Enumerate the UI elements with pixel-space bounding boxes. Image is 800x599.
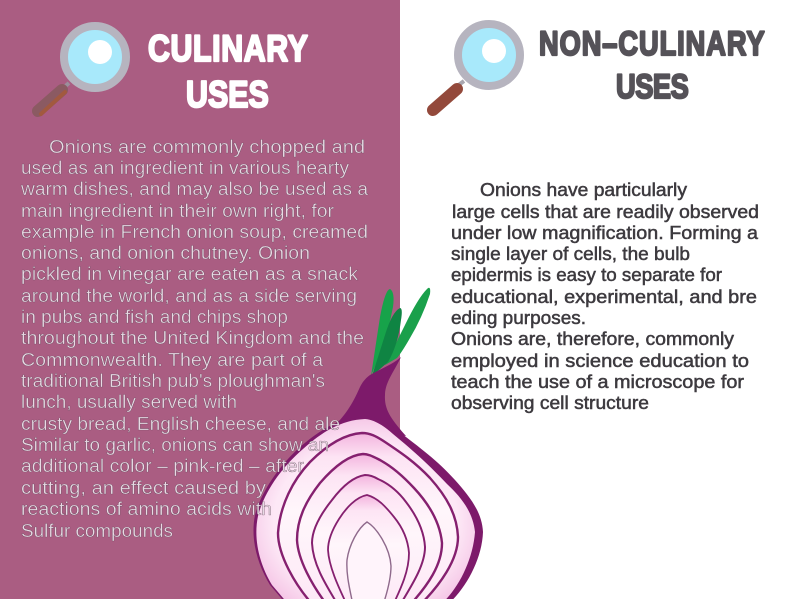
text block: culinary description: main ingredient in their own right, for xyxy=(21,201,334,221)
text block: culinary description: Onions are commonly chopped and xyxy=(49,137,365,157)
text block: culinary description: throughout the United Kingdom and the xyxy=(21,328,364,348)
panel: culinary background xyxy=(0,0,400,599)
text block: culinary description xyxy=(20,137,369,541)
text block: culinary description: reactions of amino acids with xyxy=(21,499,272,519)
text block: culinary description: Commonwealth. They are part of a xyxy=(21,350,324,370)
panel: non-culinary background xyxy=(400,0,800,599)
text block: non-culinary description: large cells that are readily observed xyxy=(452,202,759,222)
text block: culinary description: additional color – pink-red – after xyxy=(21,456,304,476)
heading: non-culinary uses xyxy=(539,24,765,106)
text block: culinary description: crusty bread, English cheese, and ale xyxy=(21,414,340,434)
text block: non-culinary description xyxy=(451,180,759,413)
text block: non-culinary description: employed in science education to xyxy=(451,351,749,371)
text block: non-culinary description: educational, experimental, and bre xyxy=(451,287,757,307)
text block: non-culinary description: Onions are, therefore, commonly xyxy=(451,329,734,349)
heading: culinary uses xyxy=(148,28,308,116)
text block: culinary description: example in French onion soup, creamed xyxy=(21,222,368,242)
text block: culinary description: lunch, usually served with xyxy=(21,392,237,412)
heading: non-culinary uses: NON–CULINARY xyxy=(539,24,765,63)
text block: culinary description: Sulfur compounds xyxy=(21,521,173,541)
text block: non-culinary description: single layer of cells, the bulb xyxy=(451,244,690,264)
text block: culinary description: in pubs and fish and chips shop xyxy=(21,307,288,327)
text block: non-culinary description: Onions have particularly xyxy=(480,180,687,200)
text block: culinary description: cutting, an effect caused by xyxy=(21,478,266,498)
heading: culinary uses: CULINARY xyxy=(148,28,308,70)
text block: non-culinary description: epidermis is easy to separate for xyxy=(451,265,722,285)
text block: culinary description: used as an ingredient in various hearty xyxy=(21,158,349,178)
text block: culinary description: warm dishes, and may also be used as a xyxy=(20,179,369,199)
text block: non-culinary description: eding purposes. xyxy=(451,308,586,328)
icon: magnifying glass, non-culinary xyxy=(433,24,520,110)
text block: culinary description: pickled in vinegar are eaten as a snack xyxy=(21,264,359,284)
text block: culinary description: around the world, and as a side serving xyxy=(21,286,357,306)
text block: culinary description: traditional British pub's ploughman's xyxy=(21,371,325,391)
icon: magnifying glass, culinary xyxy=(38,26,126,114)
text block: culinary description: Similar to garlic, onions can show an xyxy=(21,435,329,455)
illustration: red onion cross-section xyxy=(253,288,483,599)
text block: non-culinary description: under low magnification. Forming a xyxy=(451,223,759,243)
heading: non-culinary uses: USES xyxy=(616,67,689,106)
text block: culinary description: onions, and onion chutney. Onion xyxy=(21,243,310,263)
heading: culinary uses: USES xyxy=(186,74,269,116)
text block: non-culinary description: teach the use of a microscope for xyxy=(451,372,744,392)
text block: non-culinary description: observing cell structure xyxy=(451,393,649,413)
